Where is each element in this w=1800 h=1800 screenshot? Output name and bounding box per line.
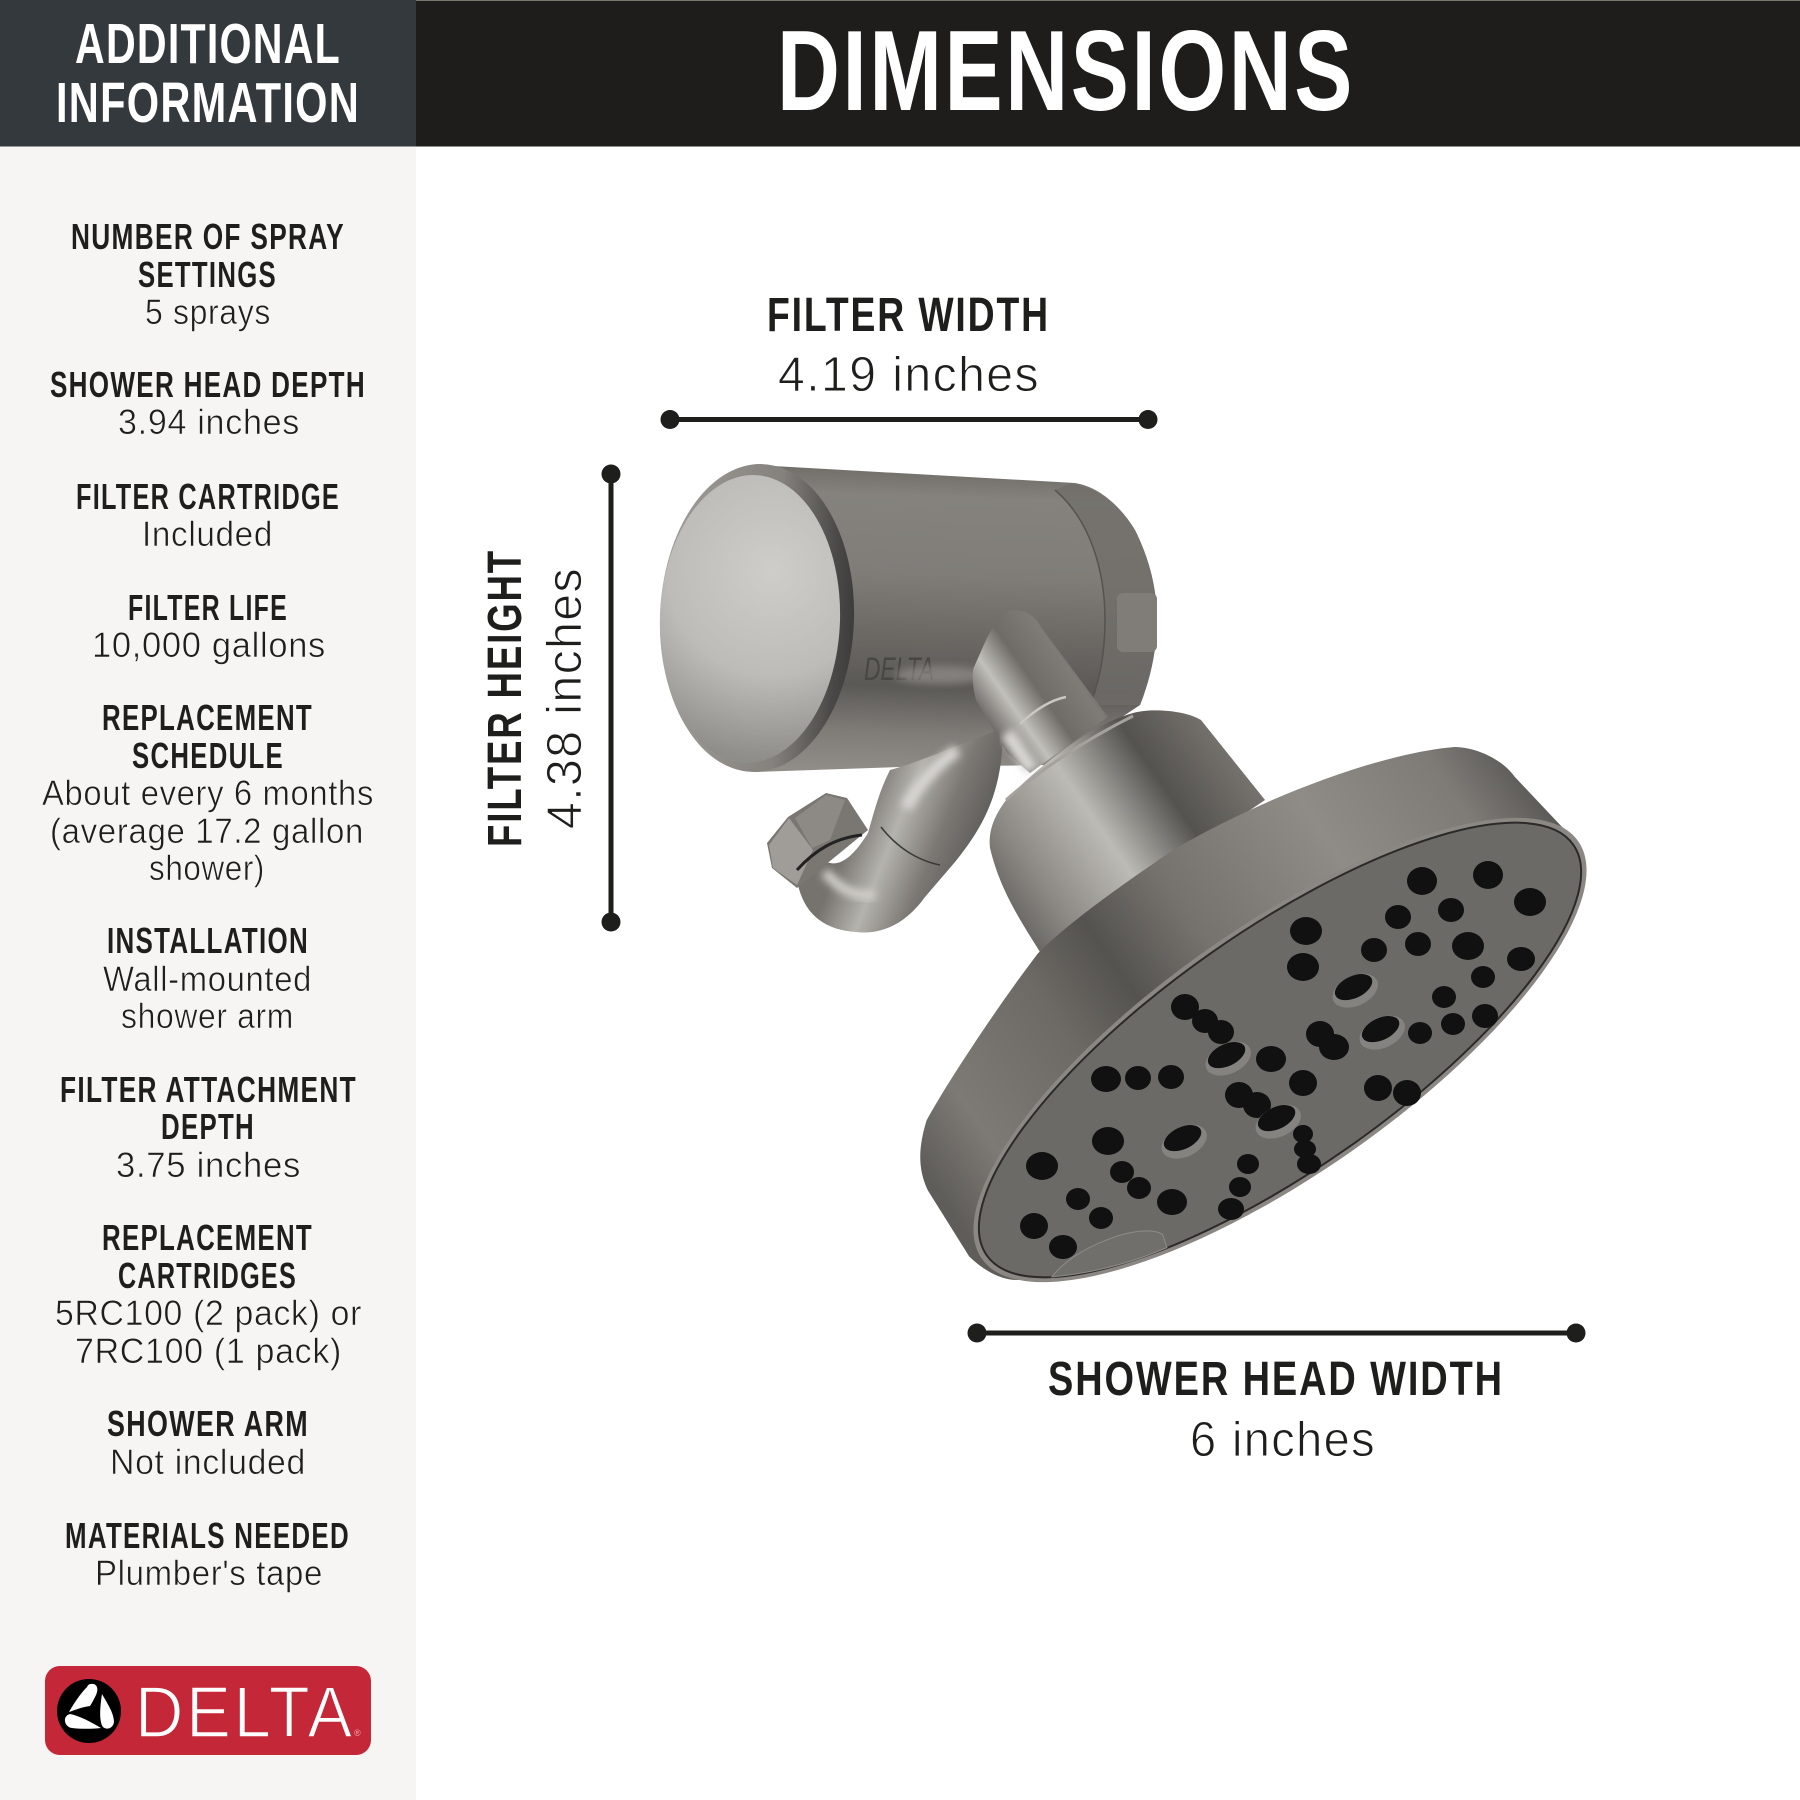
spec: materials needed	[65, 1515, 350, 1593]
sidebar panel background	[0, 146, 416, 1800]
filter end cap	[655, 461, 859, 775]
shower arm	[973, 610, 1108, 773]
spec: materials needed: MATERIALS NEEDED	[65, 1515, 350, 1556]
spec: replacement cartridges: REPLACEMENT	[102, 1217, 313, 1258]
spec: replacement cartridges	[55, 1217, 362, 1371]
spec: installation: shower arm	[121, 997, 294, 1036]
spec: filter cartridge	[76, 476, 340, 554]
spec: replacement cartridges: CARTRIDGES	[118, 1255, 297, 1296]
spec: replacement cartridges: 7RC100 (1 pack)	[75, 1332, 342, 1371]
spec: shower head depth: 3.94 inches	[118, 403, 300, 442]
dimension arrow: filter width	[660, 410, 1158, 429]
shower head width callout: 6 inches	[1190, 1413, 1376, 1467]
spec: filter life: FILTER LIFE	[128, 587, 288, 628]
header: dimensions title	[416, 0, 1800, 146]
header: additional information: ADDITIONAL	[75, 12, 341, 76]
header: additional information	[0, 0, 416, 146]
shower head disc	[845, 657, 1649, 1366]
filter height callout: FILTER HEIGHT	[479, 549, 532, 847]
logo: Delta badge: DELTA	[135, 1673, 355, 1753]
spray nozzles	[1020, 861, 1546, 1259]
spec: materials needed: Plumber's tape	[95, 1554, 323, 1593]
logo: Delta badge: ®	[354, 1728, 361, 1738]
filter cylinder body	[755, 465, 1157, 772]
spec: replacement schedule: (average 17.2 gallon	[50, 812, 364, 851]
spec: shower arm: Not included	[110, 1443, 306, 1482]
spec: filter attachment depth	[60, 1069, 357, 1185]
spec: shower arm: SHOWER ARM	[107, 1403, 309, 1444]
spec: filter cartridge: Included	[142, 515, 273, 554]
filter height callout: 4.38 inches	[538, 567, 592, 829]
logo: Delta badge	[45, 1666, 371, 1755]
filter width callout	[660, 289, 1158, 429]
spec: number of spray settings: NUMBER OF SPRAY	[71, 216, 345, 257]
spec: shower head depth	[50, 364, 366, 442]
spec: shower head depth: SHOWER HEAD DEPTH	[50, 364, 366, 405]
shower head width callout: SHOWER HEAD WIDTH	[1048, 1353, 1504, 1406]
dimension arrow: shower head width	[968, 1324, 1586, 1342]
header: dimensions title: DIMENSIONS	[777, 8, 1355, 135]
spec: installation	[103, 920, 312, 1036]
spec: number of spray settings: SETTINGS	[138, 254, 277, 295]
spec: filter life	[92, 587, 326, 665]
head face plate	[911, 740, 1649, 1360]
hook fitting with hex nut	[767, 728, 1003, 933]
centre spray slots	[1156, 967, 1410, 1165]
spec: replacement schedule	[42, 697, 374, 888]
spec: filter cartridge: FILTER CARTRIDGE	[76, 476, 340, 517]
spec: filter attachment depth: FILTER ATTACHMENT	[60, 1069, 357, 1110]
spec: filter life: 10,000 gallons	[92, 626, 326, 665]
spec: filter attachment depth: 3.75 inches	[116, 1146, 301, 1185]
spec: replacement schedule: REPLACEMENT	[102, 697, 313, 738]
spec: installation: Wall-mounted	[103, 960, 312, 999]
filter width callout: 4.19 inches	[778, 348, 1040, 402]
spec: number of spray settings: 5 sprays	[145, 293, 271, 332]
spec: filter attachment depth: DEPTH	[161, 1106, 255, 1147]
filter height callout	[479, 464, 620, 932]
shower head width callout	[968, 1324, 1586, 1467]
spec: number of spray settings	[71, 216, 345, 332]
spec: shower arm	[107, 1403, 309, 1482]
spec: replacement schedule: shower)	[149, 849, 265, 888]
spec: replacement schedule: About every 6 months	[42, 774, 374, 813]
header: additional information: INFORMATION	[56, 71, 360, 135]
spec: installation: INSTALLATION	[107, 920, 309, 961]
sidebar specification list	[42, 216, 374, 1593]
head side wall	[845, 658, 1647, 1364]
spec: replacement schedule: SCHEDULE	[132, 735, 284, 776]
spec: replacement cartridges: 5RC100 (2 pack) or	[55, 1294, 362, 1333]
filter cylinder body: DELTA	[864, 651, 934, 687]
product: filter shower head illustration	[655, 461, 1649, 1366]
filter width callout: FILTER WIDTH	[767, 289, 1050, 342]
dimension arrow: filter height	[602, 464, 620, 932]
head neck cylinder	[990, 710, 1265, 952]
